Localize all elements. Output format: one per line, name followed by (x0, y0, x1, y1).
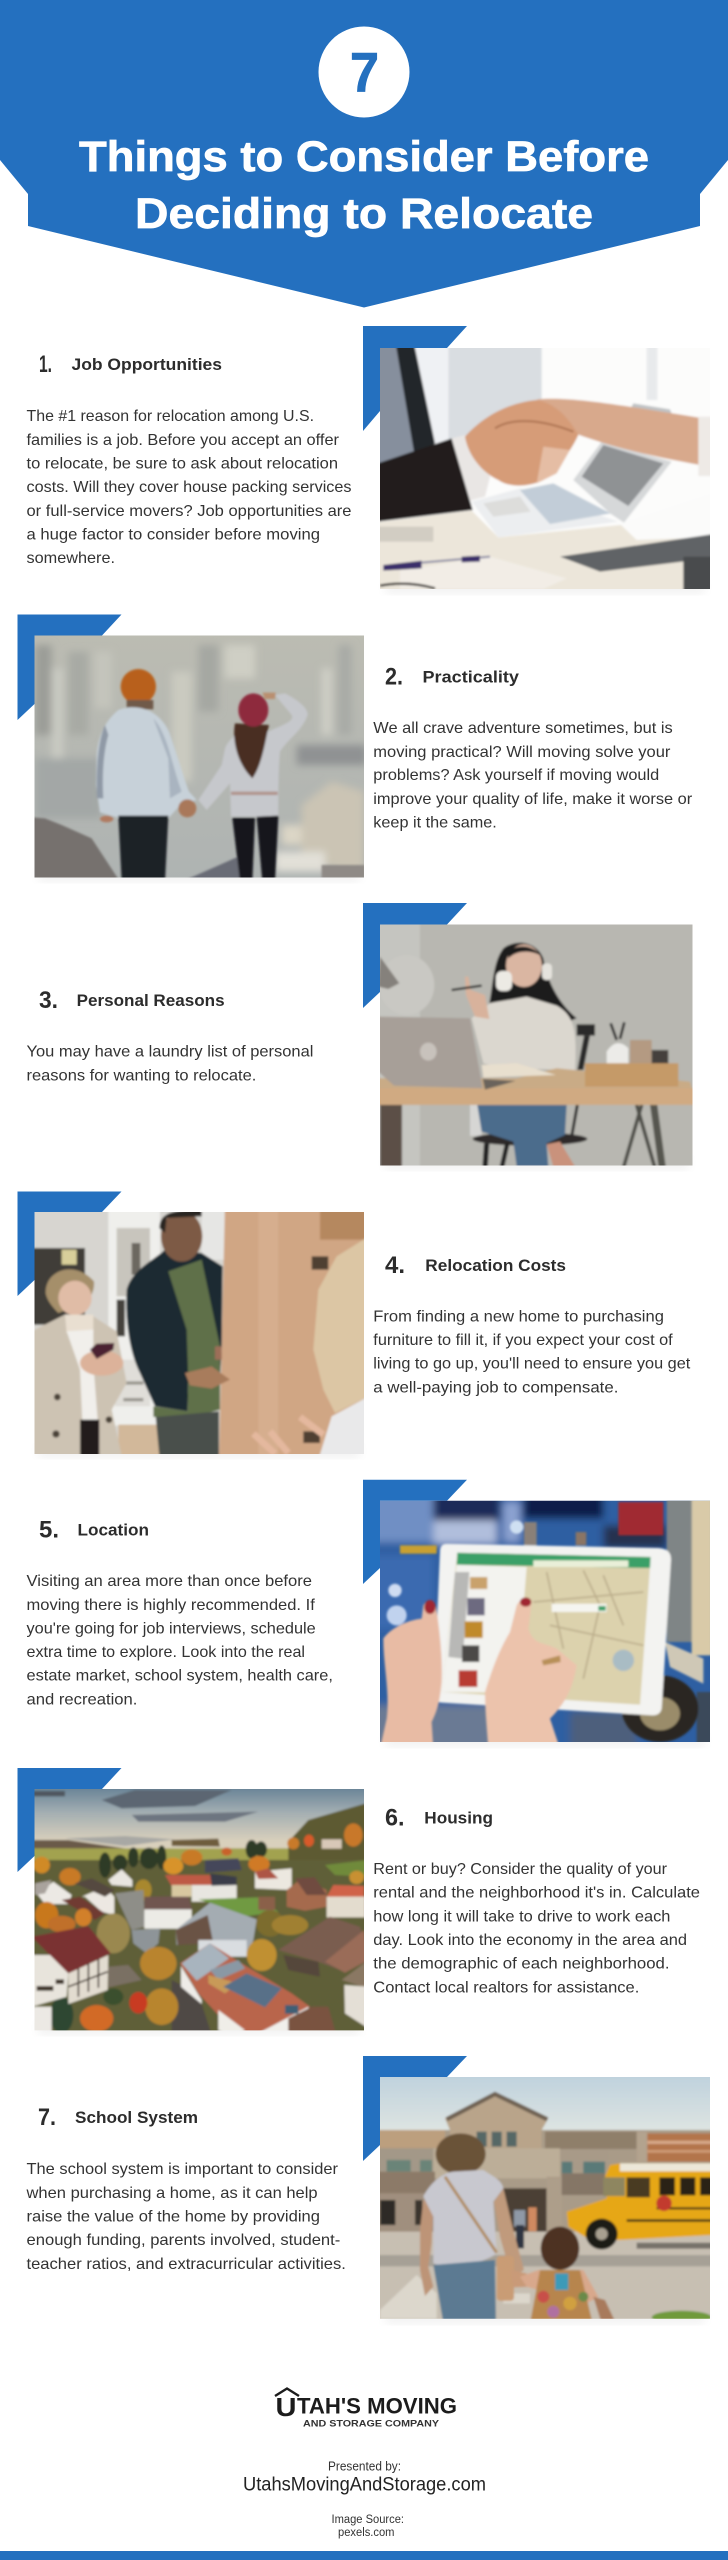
body text: day. Look into the economy in the area and (373, 1932, 687, 1949)
logo: Utah's Moving and Storage Company (275, 2388, 457, 2430)
body text: From finding a new home to purchasing (373, 1309, 664, 1326)
accent corner (363, 1480, 467, 1584)
logo: Utah's Moving and Storage Company: TAH'S MOVING (297, 2394, 457, 2418)
heading: Practicality (422, 668, 520, 686)
title: Things to Consider Before (79, 133, 649, 181)
panel: 5 location (26, 1480, 723, 1752)
body text: problems? Ask yourself if moving would (373, 767, 659, 784)
photo: couple inspecting furniture (34, 1212, 364, 1454)
heading (385, 1805, 493, 1832)
body text: enough funding, parents involved, student- (26, 2232, 340, 2249)
heading (39, 987, 225, 1014)
body text: raise the value of the home by providing (26, 2209, 320, 2226)
body text: keep it the same. (373, 815, 497, 832)
number badge: 7 (350, 41, 379, 104)
body text (26, 1573, 333, 1708)
image source (332, 2514, 404, 2539)
body text: The school system is important to consider (26, 2161, 339, 2178)
image source: Image Source: (332, 2514, 404, 2526)
body text: somewhere. (26, 550, 115, 567)
image source: pexels.com (338, 2527, 394, 2539)
logo: Utah's Moving and Storage Company: U (276, 2392, 296, 2422)
body text: extra time to explore. Look into the real (26, 1644, 305, 1661)
panel: 7 school system (25, 2056, 723, 2325)
body text: reasons for wanting to relocate. (26, 1067, 256, 1084)
title (79, 133, 649, 238)
body text: how long it will take to drive to work each (373, 1909, 670, 1926)
heading: School System (75, 2108, 198, 2127)
photo: tablet with map (380, 1500, 710, 1742)
heading: 1. (39, 351, 52, 378)
body text: You may have a laundry list of personal (26, 1044, 313, 1061)
body text: a huge factor to consider before moving (26, 526, 320, 544)
accent corner (18, 1768, 122, 1872)
heading: Job Opportunities (72, 355, 222, 374)
body text: furniture to fill it, if you expect your cost of (373, 1332, 673, 1349)
body text: costs. Will they cover house packing services (26, 479, 352, 496)
photo: mother and child at school bus (380, 2077, 710, 2319)
body text: moving there is highly recommended. If (26, 1597, 315, 1614)
heading: Relocation Costs (425, 1256, 566, 1275)
heading: 6. (385, 1805, 404, 1832)
heading: Housing (424, 1809, 493, 1828)
body text: or full-service movers? Job opportunities are (26, 503, 352, 520)
accent corner (363, 903, 467, 1008)
body text: Visiting an area more than once before (26, 1573, 312, 1590)
body text (26, 408, 352, 567)
body text: The #1 reason for relocation among U.S. (26, 408, 314, 425)
panel: 2 practicality (18, 614, 693, 885)
accent corner (18, 614, 122, 720)
body text: families is a job. Before you accept an offer (26, 432, 340, 449)
body text (25, 2161, 346, 2273)
body text: improve your quality of life, make it worse or (373, 791, 693, 808)
heading: 5. (39, 1516, 59, 1544)
heading (385, 664, 520, 690)
accent corner (363, 326, 467, 431)
number badge (318, 26, 410, 118)
bottom bar (0, 2551, 728, 2560)
panel: 1 job opportunities (26, 326, 723, 600)
photo: couple overlooking city (34, 636, 364, 878)
body text: and recreation. (26, 1691, 137, 1708)
heading: 7. (38, 2104, 56, 2131)
heading (39, 1516, 149, 1544)
body text: the demographic of each neighborhood. (373, 1956, 670, 1973)
presented by: Presented by: (328, 2460, 401, 2474)
heading: 3. (39, 987, 58, 1014)
body text: We all crave adventure sometimes, but is (373, 720, 673, 737)
body text (373, 1309, 691, 1396)
website: UtahsMovingAndStorage.com (243, 2474, 486, 2496)
heading (39, 351, 222, 378)
body text: Rent or buy? Consider the quality of your (373, 1861, 668, 1878)
photo: handshake over laptop (380, 348, 710, 589)
body text: rental and the neighborhood it's in. Calculate (373, 1885, 700, 1902)
body text (26, 1044, 313, 1084)
panel: 3 personal reasons (26, 903, 703, 1175)
body text: you're going for job interviews, schedule (26, 1620, 316, 1638)
body text (373, 720, 693, 832)
body text (373, 1861, 700, 1996)
panel: 4 relocation costs (18, 1192, 691, 1463)
photo: aerial village in autumn (34, 1789, 364, 2030)
body text: estate market, school system, health care, (26, 1668, 333, 1685)
body text: Contact local realtors for assistance. (373, 1980, 639, 1996)
body text: to relocate, be sure to ask about relocation (26, 456, 338, 472)
heading (385, 1252, 566, 1279)
heading: Location (78, 1520, 149, 1540)
body text: when purchasing a home, as it can help (25, 2185, 318, 2202)
footer (243, 2388, 486, 2539)
accent corner (363, 2056, 467, 2161)
heading: Personal Reasons (77, 991, 225, 1010)
title: Deciding to Relocate (135, 190, 593, 238)
header banner (0, 0, 728, 308)
body text: moving practical? Will moving solve your (373, 744, 671, 761)
logo: Utah's Moving and Storage Company: AND STORAGE COMPANY (303, 2418, 440, 2430)
heading: 4. (385, 1252, 405, 1279)
accent corner (18, 1192, 122, 1296)
body text: living to go up, you'll need to ensure you get (373, 1356, 691, 1373)
heading (38, 2104, 198, 2131)
body text: a well-paying job to compensate. (373, 1379, 618, 1396)
body text: teacher ratios, and extracurricular activities. (26, 2256, 346, 2273)
photo: woman thinking at desk (380, 924, 692, 1166)
heading: 2. (385, 664, 403, 690)
panel: 6 housing (18, 1768, 700, 2040)
